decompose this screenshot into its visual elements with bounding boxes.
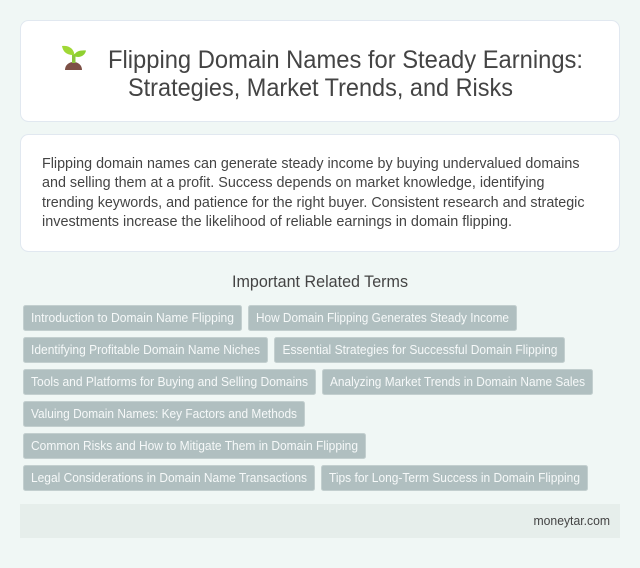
summary text: and selling them at a profit. Success depends on market knowledge, identifying xyxy=(42,175,544,191)
summary text: investments increase the likelihood of reliable earnings in domain flipping. xyxy=(42,214,512,230)
tag: Legal Considerations in Domain Name Transactions xyxy=(31,470,307,485)
footer: moneytar.com xyxy=(534,513,610,528)
title xyxy=(108,46,583,102)
tag: Essential Strategies for Successful Domain Flipping xyxy=(282,342,558,357)
tag: Analyzing Market Trends in Domain Name Sales xyxy=(330,374,585,389)
tag xyxy=(274,338,564,362)
summary text xyxy=(42,156,585,230)
summary text: Flipping domain names can generate steady income by buying undervalued domains xyxy=(42,156,580,172)
panel: title card xyxy=(20,20,620,122)
tag: Identifying Profitable Domain Name Niches xyxy=(31,342,260,357)
tag xyxy=(322,370,592,394)
tag: Tips for Long-Term Success in Domain Flipping xyxy=(329,470,580,485)
tag xyxy=(24,402,304,426)
icon: seedling xyxy=(62,46,86,70)
tag: Valuing Domain Names: Key Factors and Methods xyxy=(31,406,297,421)
panel: term tags xyxy=(24,306,592,490)
summary text: trending keywords, and patience for the right buyer. Consistent research and strategic xyxy=(42,195,585,211)
tag: Introduction to Domain Name Flipping xyxy=(31,310,234,325)
tag xyxy=(24,370,316,394)
tag xyxy=(248,306,516,330)
title: Strategies, Market Trends, and Risks xyxy=(128,74,513,102)
tag xyxy=(322,466,588,490)
footer xyxy=(20,504,620,538)
tag xyxy=(24,306,242,330)
tag xyxy=(24,434,366,458)
tag: How Domain Flipping Generates Steady Income xyxy=(256,310,509,325)
heading: related terms: Important Related Terms xyxy=(232,273,408,291)
tag xyxy=(24,466,314,490)
title: Flipping Domain Names for Steady Earnings: xyxy=(108,46,583,74)
panel: summary card xyxy=(20,134,620,252)
tag xyxy=(24,338,268,362)
tag: Tools and Platforms for Buying and Selling Domains xyxy=(31,374,308,389)
tag: Common Risks and How to Mitigate Them in Domain Flipping xyxy=(31,438,358,453)
